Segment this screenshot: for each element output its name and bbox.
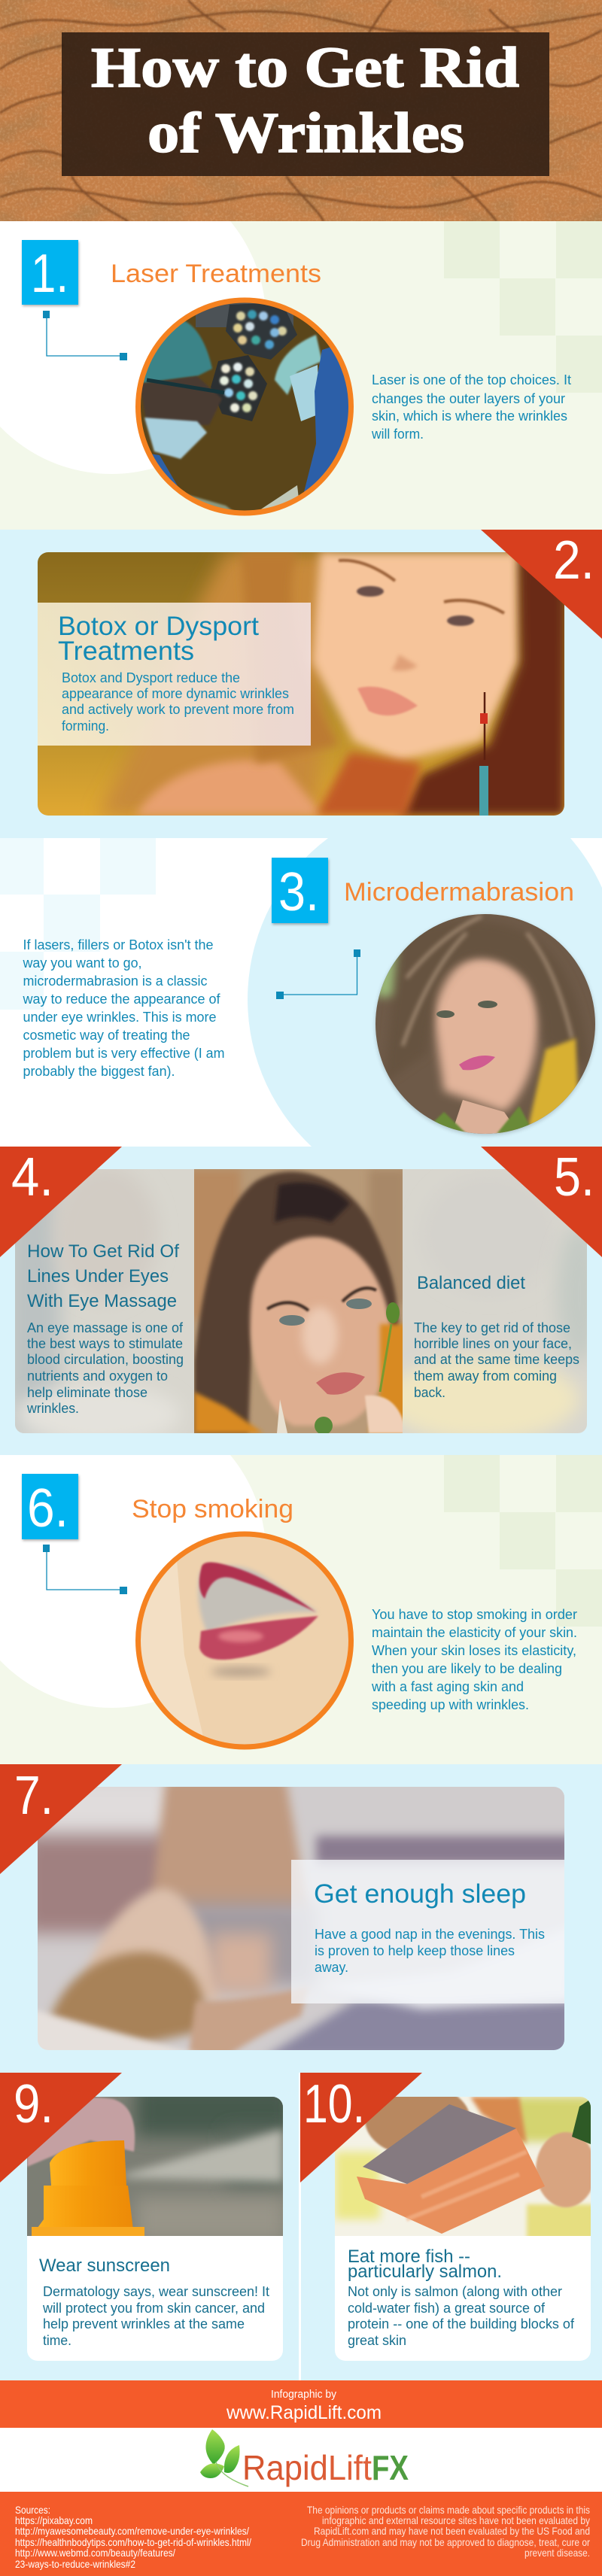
heading: eat more fish: Eat more fish --	[348, 2246, 470, 2267]
text: smoking description: You have to stop smoking in order	[372, 1607, 577, 1622]
text: salmon description: cold-water fish) a great source of	[348, 2300, 546, 2316]
number corner 5: 5.	[554, 1147, 594, 1208]
sources list: Sources:	[15, 2504, 50, 2516]
card 9	[27, 2084, 293, 2361]
heading: eat more fish: particularly salmon.	[348, 2262, 502, 2282]
text: eye massage description: help eliminate those	[27, 1384, 147, 1400]
photo: woman with flower	[188, 1169, 406, 1435]
number corner 2: 2.	[553, 530, 594, 591]
text: smoking description: When your skin loses its elasticity,	[372, 1643, 576, 1658]
photo: woman with auburn hair	[38, 552, 564, 816]
number corner 7: 7.	[14, 1766, 53, 1826]
photo: salmon fillet	[335, 2097, 591, 2236]
panel: 2 botox or dysport	[0, 530, 602, 838]
number corner 4: 4.	[11, 1147, 53, 1208]
panel: 10 eat more fish	[300, 2073, 602, 2380]
text: microdermabrasion description: way you want to go,	[23, 955, 142, 971]
text: salmon description: protein -- one of the building blocks of	[348, 2316, 575, 2331]
connector arrow 6	[43, 1545, 127, 1594]
number corner 9	[0, 2073, 122, 2183]
heading: botox or dysport: Treatments	[58, 636, 194, 666]
text: microdermabrasion description: microdermabrasion is a classic	[23, 974, 208, 989]
text: laser description: will form.	[371, 427, 424, 442]
text: botox description: Botox and Dysport reduce the	[62, 670, 240, 685]
sources list: https://healthnbodytips.com/how-to-get-rid-of-wrinkles.html/	[15, 2536, 251, 2548]
heading: microdermabrasion: Microdermabrasion	[344, 878, 574, 907]
number corner 10	[300, 2073, 422, 2183]
number corner 9: 9.	[14, 2074, 53, 2134]
number corner 10: 10.	[303, 2074, 365, 2134]
credit band	[0, 2380, 602, 2428]
disclaimer	[301, 2504, 590, 2559]
text: sunscreen description: Dermatology says, wear sunscreen! It	[43, 2283, 269, 2299]
sources list: http://myawesomebeauty.com/remove-under-eye-wrinkles/	[15, 2525, 249, 2537]
text: microdermabrasion description: way to reduce the appearance of	[23, 992, 220, 1007]
text: smoking description: speeding up with wrinkles.	[372, 1697, 529, 1712]
text: laser description: Laser is one of the top choices. It	[372, 372, 571, 387]
text: smoking description: maintain the elasticity of your skin.	[372, 1625, 577, 1640]
sources list: https://pixabay.com	[15, 2514, 93, 2526]
photo background: washed out meadow	[8, 1166, 602, 1444]
number corner 4	[0, 1147, 122, 1257]
text: botox description: appearance of more dynamic wrinkles	[62, 686, 289, 701]
number badge 3: 3.	[278, 862, 319, 922]
text: laser description: skin, which is where the wrinkles	[372, 409, 567, 424]
heading: get enough sleep: Get enough sleep	[314, 1879, 526, 1909]
text: eye massage description	[26, 1320, 184, 1416]
heading: eye massage: How To Get Rid Of	[27, 1241, 179, 1262]
text: smoking description	[371, 1607, 577, 1712]
overlay text panel	[291, 1860, 564, 2003]
text: sleep description: away.	[315, 1960, 348, 1975]
text: balanced diet description: and at the same time keeps	[414, 1351, 579, 1367]
card 10	[335, 2084, 596, 2361]
overlay text panel	[38, 603, 311, 746]
text: microdermabrasion description: under eye wrinkles. This is more	[23, 1010, 217, 1025]
sources list: http://www.webmd.com/beauty/features/	[15, 2547, 175, 2559]
text: balanced diet description	[414, 1320, 579, 1400]
header: cracked skin texture banner	[0, 0, 602, 221]
photo: sunscreen spray bottle	[27, 2097, 283, 2236]
text: sunscreen description: help prevent wrinkles at the same	[43, 2316, 245, 2331]
sources list	[15, 2504, 251, 2570]
heading: botox or dysport: Botox or Dysport	[58, 612, 259, 641]
photo: woman in circle	[375, 914, 595, 1135]
text: sunscreen description: time.	[43, 2332, 71, 2348]
footer band	[0, 2492, 602, 2576]
text: salmon description	[348, 2283, 575, 2348]
text: sunscreen description: will protect you from skin cancer, and	[42, 2300, 265, 2316]
text: laser description: changes the outer layers of your	[372, 391, 565, 406]
text: microdermabrasion description: probably the biggest fan).	[23, 1064, 175, 1079]
title panel	[62, 32, 549, 176]
logo: RapidLiftFX: FX	[372, 2448, 409, 2487]
heading: eat more fish	[348, 2246, 502, 2282]
disclaimer: prevent disease.	[524, 2547, 590, 2559]
title	[91, 36, 519, 165]
text: balanced diet description: The key to get rid of those	[414, 1320, 570, 1335]
icon: green leaves	[200, 2429, 248, 2486]
photo: smoking lips in orange circle	[135, 1531, 355, 1753]
panel: 4 and 5 eye massage and balanced diet	[0, 1147, 602, 1455]
text: botox description: and actively work to prevent more from	[62, 702, 294, 717]
heading: eye massage: With Eye Massage	[27, 1291, 177, 1311]
credit band: Infographic by	[271, 2388, 336, 2401]
heading: wear sunscreen: Wear sunscreen	[39, 2256, 170, 2276]
text: balanced diet description: them away from coming	[414, 1368, 557, 1384]
number corner 5	[481, 1147, 602, 1257]
text: smoking description: then you are likely to be dealing	[372, 1661, 562, 1676]
panel: 6 stop smoking	[0, 1455, 602, 1764]
logo: RapidLiftFX: RapidLift	[242, 2448, 372, 2487]
heading: eye massage: Lines Under Eyes	[27, 1266, 169, 1286]
connector arrow 1	[43, 311, 127, 360]
text: microdermabrasion description	[23, 937, 225, 1079]
panel: 1 laser treatments	[0, 221, 602, 530]
title: How to Get Rid	[91, 36, 519, 99]
credit band: www.RapidLift.com	[226, 2402, 382, 2423]
number corner 2	[481, 530, 602, 639]
heading: eye massage	[27, 1241, 179, 1311]
text: botox description: forming.	[62, 718, 109, 734]
text: sleep description: is proven to help keep those lines	[315, 1943, 515, 1958]
panel: 3 microdermabrasion	[0, 838, 602, 1147]
title: of Wrinkles	[147, 102, 464, 165]
text: eye massage description: wrinkles.	[26, 1400, 79, 1416]
number corner 7	[0, 1764, 122, 1874]
text: microdermabrasion description: cosmetic way of treating the	[23, 1028, 190, 1043]
photo: surgeons in orange circle	[135, 297, 357, 523]
text: balanced diet description: horrible lines on your face,	[414, 1335, 572, 1351]
text: sleep description	[315, 1927, 545, 1975]
text: botox description	[62, 670, 294, 734]
number badge 6: 6.	[27, 1478, 68, 1539]
heading: balanced diet: Balanced diet	[417, 1273, 525, 1293]
text: laser description	[371, 372, 571, 442]
heading: stop smoking: Stop smoking	[132, 1495, 293, 1523]
sources list: 23-ways-to-reduce-wrinkles#2	[15, 2558, 135, 2570]
panel: 9 wear sunscreen	[0, 2073, 299, 2380]
text: eye massage description: An eye massage is one of	[27, 1320, 184, 1335]
number badge 1: 1.	[31, 244, 68, 304]
text: microdermabrasion description: problem but is very effective (I am	[23, 1046, 224, 1061]
heading: botox or dysport	[58, 612, 259, 666]
text: salmon description: great skin	[348, 2332, 406, 2348]
text: microdermabrasion description: If lasers, fillers or Botox isn't the	[23, 937, 214, 952]
connector arrow 3	[276, 949, 360, 999]
text: balanced diet description: back.	[414, 1384, 445, 1400]
text: eye massage description: nutrients and oxygen to	[27, 1368, 168, 1384]
photo: woman resting in bed	[23, 1779, 572, 2058]
panel: 7 get enough sleep	[0, 1764, 602, 2073]
text: eye massage description: blood circulation, boosting	[27, 1351, 184, 1367]
heading: laser treatments: Laser Treatments	[111, 260, 321, 288]
text: smoking description: with a fast aging skin and	[371, 1679, 524, 1694]
text: sleep description: Have a good nap in the evenings. This	[315, 1927, 545, 1942]
text: salmon description: Not only is salmon (along with other	[348, 2283, 562, 2299]
text: eye massage description: the best ways to stimulate	[27, 1335, 183, 1351]
text: sunscreen description	[42, 2283, 269, 2348]
logo: RapidLiftFX	[0, 2428, 602, 2492]
